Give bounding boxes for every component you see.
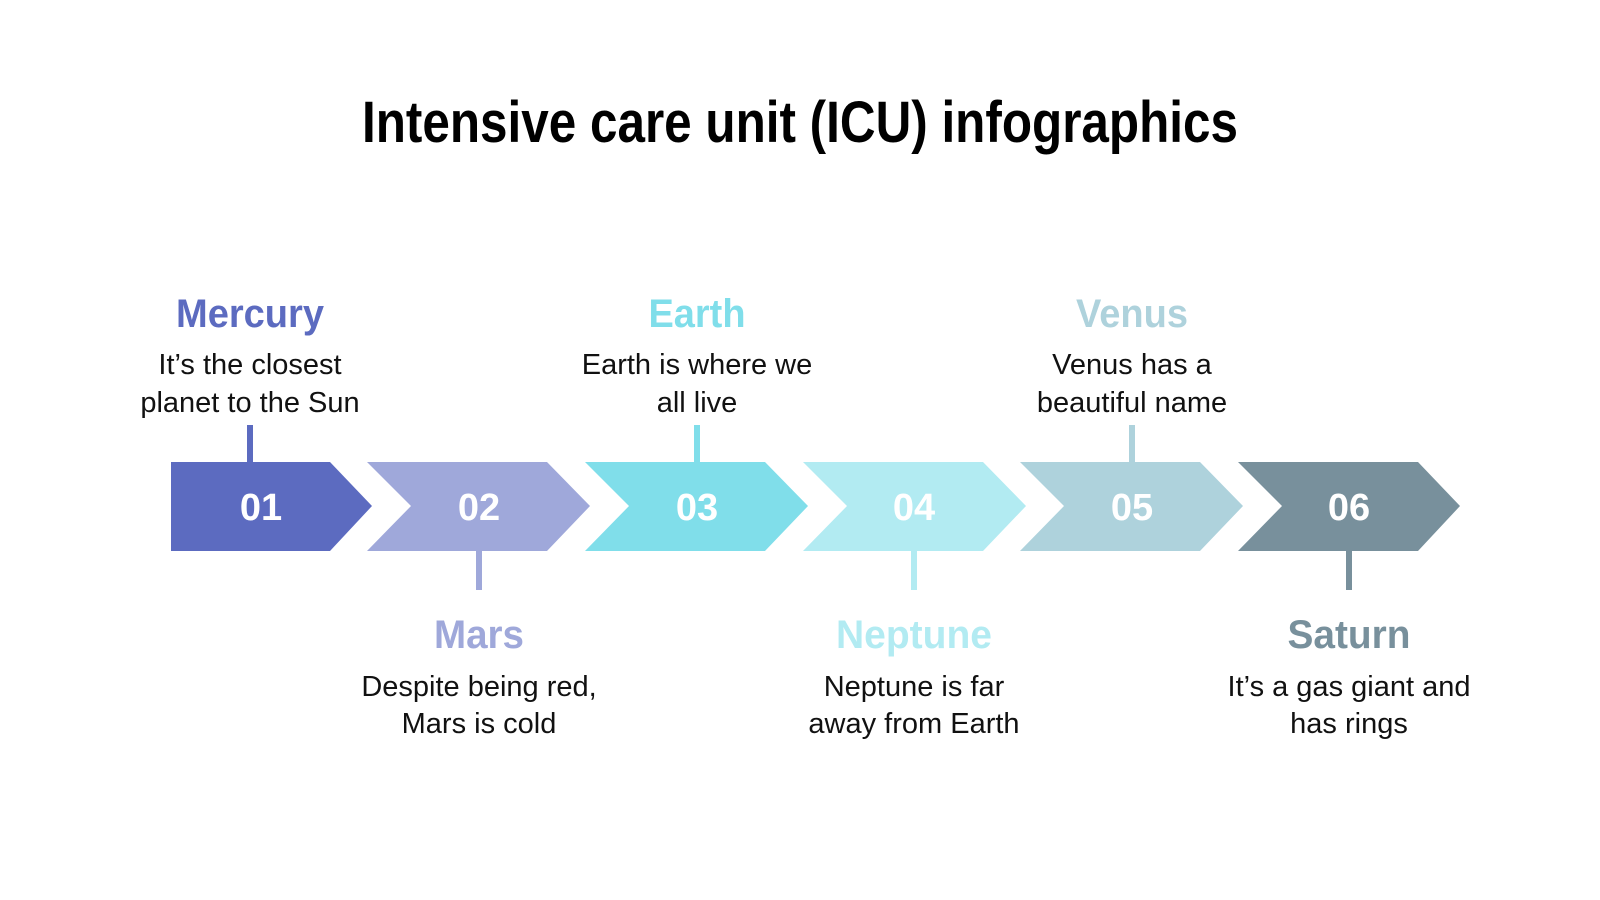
step 5: Venus: Venus has a — [1052, 349, 1213, 381]
step 1: Mercury — [140, 292, 372, 551]
step 3: Earth: Earth is where we — [582, 349, 812, 381]
step 2: Mars: Mars is cold — [402, 708, 556, 740]
step 1: Mercury: It’s the closest — [158, 349, 342, 381]
step 2: Mars: Despite being red, — [361, 671, 597, 703]
step 2: Mars — [361, 462, 597, 740]
step 3: Earth — [582, 292, 812, 551]
step 5: Venus: Venus — [1076, 292, 1188, 336]
title: Intensive care unit (ICU) infographics — [362, 90, 1238, 155]
step 4: Neptune: Neptune — [836, 613, 992, 657]
step 3: Earth: 03 — [676, 487, 718, 529]
step 6: Saturn — [1228, 462, 1470, 740]
step 3: Earth: Earth — [648, 292, 746, 336]
step 6: Saturn: Saturn — [1288, 613, 1410, 657]
step 1: Mercury: Mercury — [176, 292, 325, 336]
step 2: Mars: 02 — [458, 487, 500, 529]
step 5: Venus — [1020, 292, 1243, 551]
step 6: Saturn: has rings — [1290, 708, 1408, 740]
step 4: Neptune — [803, 462, 1026, 740]
step 4: Neptune: away from Earth — [808, 708, 1020, 740]
step 4: Neptune: 04 — [893, 487, 935, 529]
step 5: Venus: 05 — [1111, 487, 1153, 529]
step 3: Earth: all live — [657, 387, 737, 419]
step 2: Mars: Mars — [434, 613, 524, 657]
step 6: Saturn: It’s a gas giant and — [1228, 671, 1470, 703]
step 5: Venus: beautiful name — [1037, 387, 1227, 419]
step 6: Saturn: 06 — [1328, 487, 1370, 529]
step 4: Neptune: Neptune is far — [824, 671, 1005, 703]
step 1: Mercury: planet to the Sun — [140, 387, 360, 419]
step 1: Mercury: 01 — [240, 487, 282, 529]
